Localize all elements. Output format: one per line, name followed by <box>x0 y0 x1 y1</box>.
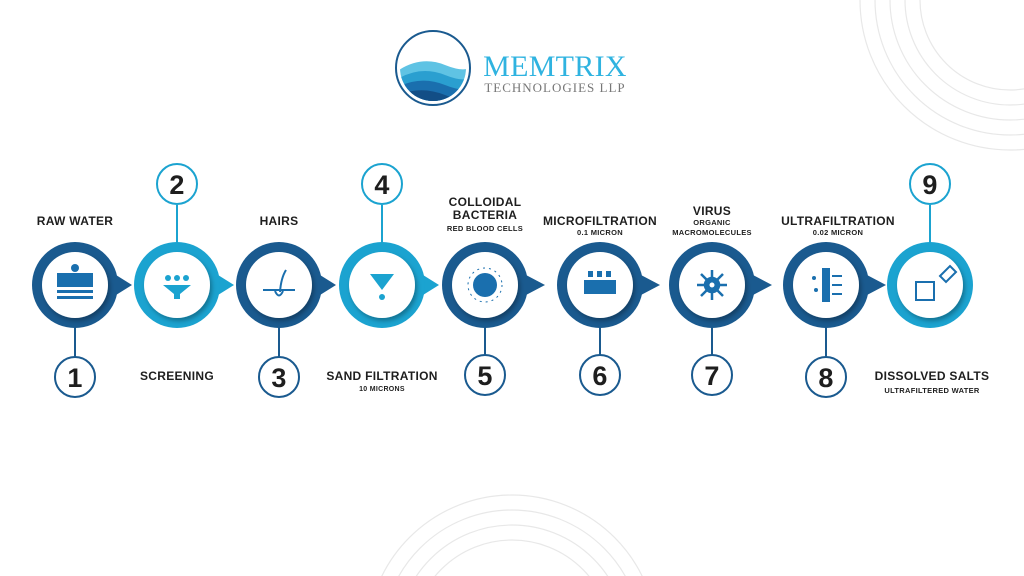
step 4: sand filtration: 4 <box>374 170 390 200</box>
step 5: colloidal bacteria <box>442 195 545 395</box>
step 2: screening: 2 <box>169 170 185 200</box>
step 5: colloidal bacteria: COLLOIDAL <box>449 195 521 209</box>
step 4: sand filtration <box>326 164 439 393</box>
logo: MEMTRIX <box>483 50 627 83</box>
step 7: virus: 7 <box>704 361 720 391</box>
step 1: raw water <box>32 214 132 397</box>
step 1: raw water: 1 <box>67 363 83 393</box>
step 8: ultrafiltration <box>781 214 895 397</box>
step 9: dissolved salts <box>875 164 989 395</box>
step 3: hairs: 3 <box>271 363 287 393</box>
step 9: dissolved salts: ULTRAFILTERED WATER <box>884 386 980 395</box>
step 3: hairs <box>236 214 336 397</box>
step 7: virus: VIRUS <box>693 204 731 218</box>
step 2: screening <box>134 164 234 383</box>
step 5: colloidal bacteria: BACTERIA <box>453 208 517 222</box>
step 6: microfiltration: MICROFILTRATION <box>543 214 657 228</box>
step 4: sand filtration: 10 MICRONS <box>359 386 405 393</box>
step 6: microfiltration: 6 <box>592 361 608 391</box>
step 6: microfiltration <box>543 214 660 395</box>
step 7: virus: MACROMOLECULES <box>672 228 752 237</box>
step 8: ultrafiltration: 0.02 MICRON <box>813 228 863 237</box>
step 6: microfiltration: 0.1 MICRON <box>577 228 623 237</box>
logo <box>396 31 627 110</box>
step 8: ultrafiltration: 8 <box>818 363 834 393</box>
step 8: ultrafiltration: ULTRAFILTRATION <box>781 214 895 228</box>
step 9: dissolved salts: 9 <box>922 170 938 200</box>
step 9: dissolved salts: DISSOLVED SALTS <box>875 369 989 383</box>
step 5: colloidal bacteria: RED BLOOD CELLS <box>447 224 523 233</box>
logo: TECHNOLOGIES LLP <box>484 80 626 95</box>
step 3: hairs: HAIRS <box>260 214 298 228</box>
step 7: virus: ORGANIC <box>693 218 731 227</box>
step 2: screening: SCREENING <box>140 369 214 383</box>
step 5: colloidal bacteria: 5 <box>477 361 493 391</box>
step 1: raw water: RAW WATER <box>37 214 113 228</box>
step 4: sand filtration: SAND FILTRATION <box>326 369 438 383</box>
step 7: virus <box>669 204 772 395</box>
